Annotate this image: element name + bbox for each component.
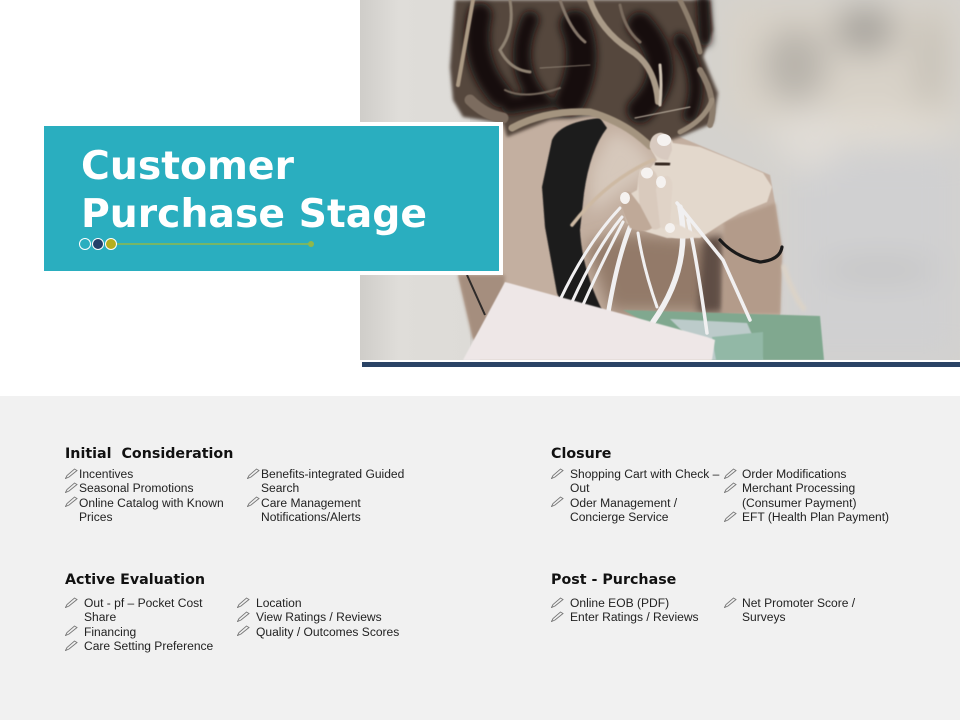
list: Prices bbox=[79, 510, 112, 524]
list: Financing bbox=[84, 625, 136, 639]
black top strap bbox=[542, 118, 607, 312]
section: Initial Consideration bbox=[65, 446, 404, 524]
panel: stage details bbox=[0, 396, 960, 720]
heading: Active Evaluation bbox=[65, 572, 205, 588]
thin strap bbox=[467, 275, 485, 315]
list: Oder Management / bbox=[570, 496, 677, 510]
bag handles bbox=[560, 203, 750, 333]
title banner bbox=[44, 122, 503, 275]
title bbox=[81, 144, 427, 237]
section: Post - Purchase bbox=[551, 572, 856, 624]
list: Surveys bbox=[742, 610, 786, 624]
title: Purchase Stage bbox=[81, 192, 427, 237]
hair lock bbox=[572, 160, 653, 225]
list: Net Promoter Score / bbox=[742, 596, 855, 610]
list bbox=[551, 596, 856, 624]
list: Notifications/Alerts bbox=[261, 510, 361, 524]
green bag bbox=[623, 310, 824, 360]
inner bag bbox=[670, 319, 763, 360]
fingers bbox=[620, 133, 700, 239]
list: Online Catalog with Known bbox=[79, 496, 224, 510]
blond strands bbox=[783, 265, 805, 310]
heading: Post - Purchase bbox=[551, 572, 676, 588]
list: Incentives bbox=[79, 467, 133, 481]
list bbox=[551, 467, 889, 524]
forearm bbox=[722, 203, 782, 314]
list: Enter Ratings / Reviews bbox=[570, 610, 699, 624]
hand bbox=[620, 133, 772, 238]
list: Care Setting Preference bbox=[84, 639, 213, 653]
list bbox=[65, 596, 399, 653]
list: Out - pf – Pocket Cost bbox=[84, 596, 203, 610]
navy accent bar bbox=[362, 362, 960, 367]
section: Closure bbox=[551, 446, 889, 524]
list: (Consumer Payment) bbox=[742, 496, 856, 510]
title ornament: dots and line bbox=[79, 238, 314, 250]
dark hair waves bbox=[478, 0, 705, 115]
list: Seasonal Promotions bbox=[79, 481, 194, 495]
list: Merchant Processing bbox=[742, 481, 855, 495]
list: Order Modifications bbox=[742, 467, 846, 481]
shaded lower back bbox=[585, 232, 722, 312]
list: Online EOB (PDF) bbox=[570, 596, 669, 610]
list: Search bbox=[261, 481, 299, 495]
back and shoulder skin bbox=[458, 115, 782, 360]
list: Concierge Service bbox=[570, 510, 668, 524]
heading: Initial Consideration bbox=[65, 446, 233, 462]
list: Shopping Cart with Check – bbox=[570, 467, 719, 481]
photo: woman holding shopping bags bbox=[360, 0, 960, 360]
list: EFT (Health Plan Payment) bbox=[742, 510, 889, 524]
list: Share bbox=[84, 610, 116, 624]
title: Customer bbox=[81, 144, 294, 189]
shoulder highlight bbox=[590, 132, 655, 215]
bracelet bbox=[720, 240, 782, 262]
list bbox=[65, 467, 404, 524]
hair bbox=[450, 0, 718, 147]
background bbox=[360, 0, 960, 360]
section: Active Evaluation bbox=[65, 572, 399, 653]
fingernails bbox=[620, 134, 675, 233]
list: Benefits-integrated Guided bbox=[261, 467, 404, 481]
list: Location bbox=[256, 596, 302, 610]
list: Care Management bbox=[261, 496, 361, 510]
list: View Ratings / Reviews bbox=[256, 610, 382, 624]
white bag bbox=[463, 282, 715, 360]
list: Out bbox=[570, 481, 589, 495]
heading: Closure bbox=[551, 446, 611, 462]
list: Quality / Outcomes Scores bbox=[256, 625, 399, 639]
